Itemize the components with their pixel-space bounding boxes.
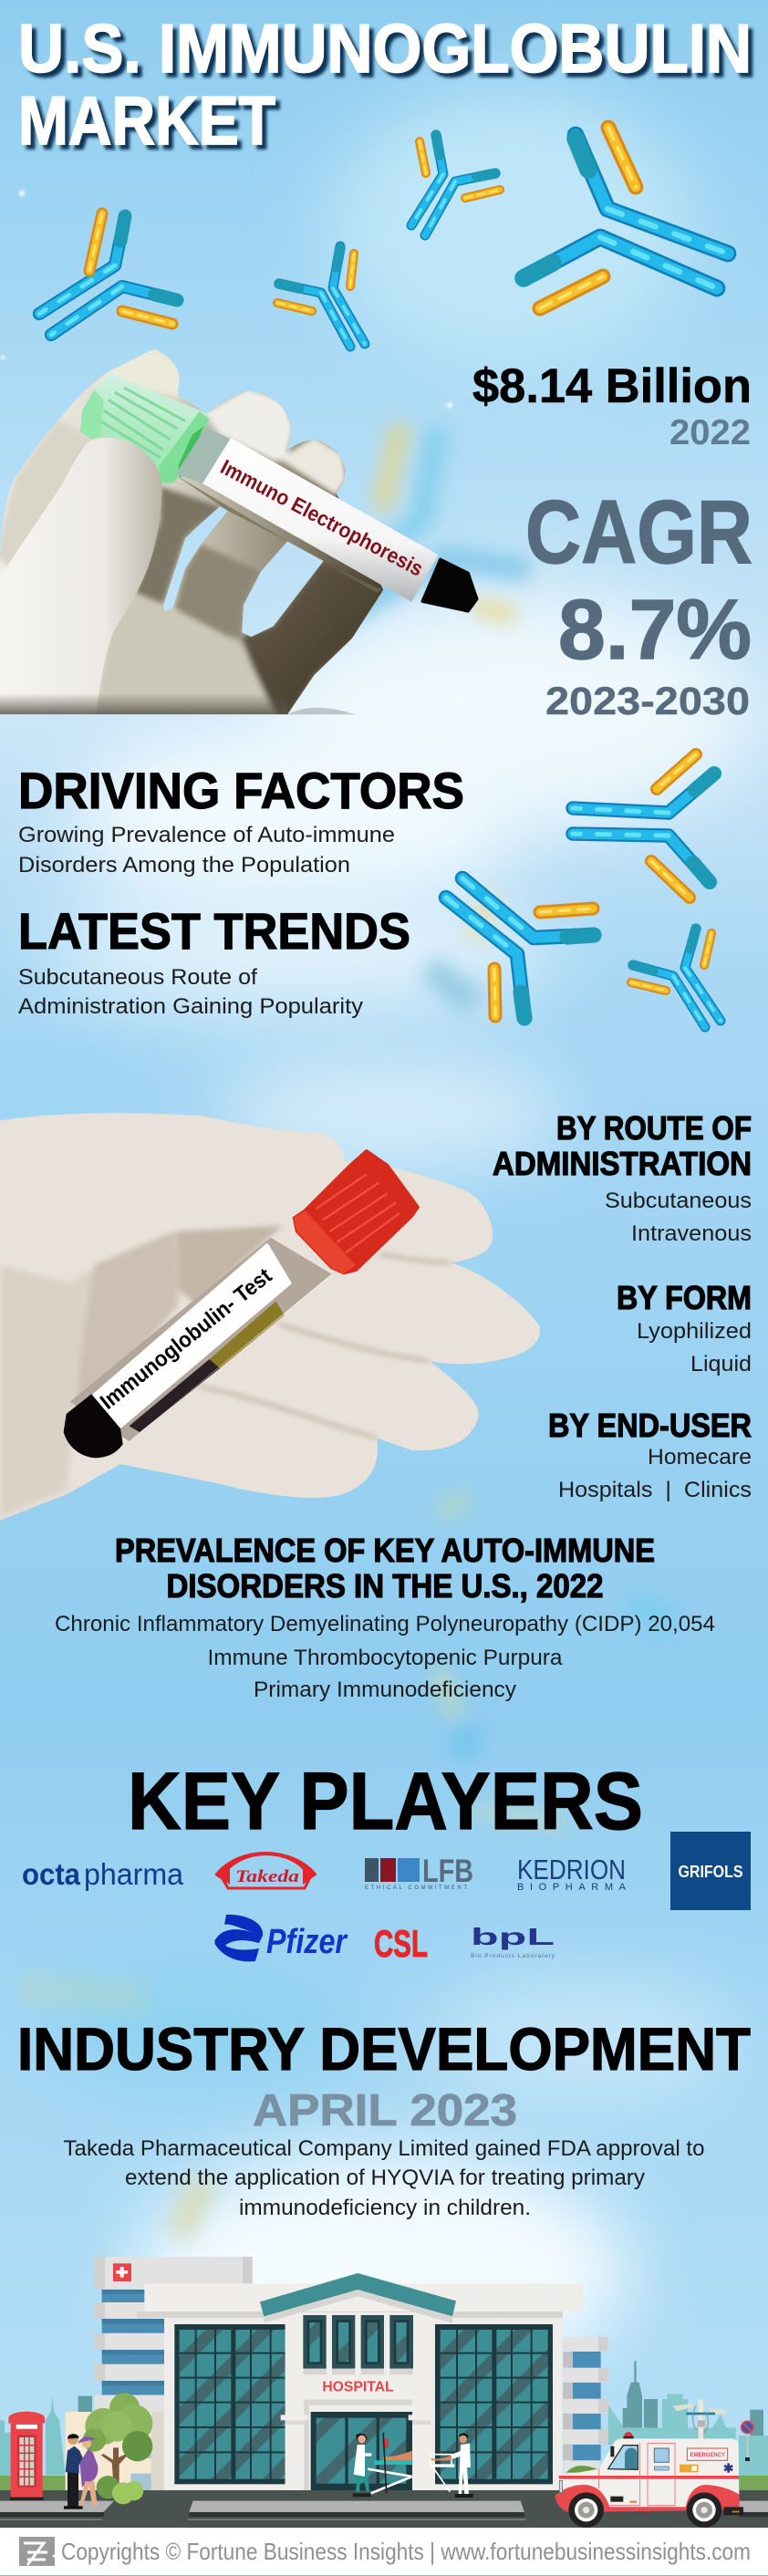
development text — [64, 2136, 705, 2220]
segment: by end-user: Homecare — [648, 1445, 752, 1470]
heading: driving factors — [18, 762, 464, 878]
segment: by route of administration: Intravenous — [631, 1221, 752, 1246]
hospital sign: HOSPITAL — [322, 2380, 394, 2395]
tube label text: Immuno Electrophoresis — [217, 454, 427, 581]
logo: Takeda: Takeda — [235, 1867, 300, 1886]
logo: Takeda — [215, 1854, 316, 1888]
ambulance — [555, 2432, 743, 2528]
illustration: hospital scene — [0, 2257, 768, 2529]
CAGR: 8.7% — [558, 582, 752, 677]
logo: CSL: CSL — [374, 1922, 428, 1965]
grass — [0, 2476, 67, 2501]
couple — [64, 2434, 98, 2509]
CAGR: 2023-2030 — [545, 680, 750, 723]
back tower — [94, 2257, 253, 2412]
heading and list: prevalence: Immune Thrombocytopenic Purpura — [208, 1646, 563, 1670]
segment: by end-user: Hospitals | Clinics — [558, 1478, 752, 1502]
logo: BPL — [471, 1923, 555, 1959]
test tube red cap — [294, 1150, 418, 1274]
heading: latest trends: Subcutaneous Route of — [18, 965, 257, 990]
icon: antibody 3 — [411, 135, 500, 235]
segment: by form: BY FORM — [617, 1279, 752, 1316]
CAGR — [525, 482, 752, 723]
footer — [0, 2528, 768, 2576]
heading and list: prevalence: PREVALENCE OF KEY AUTO-IMMUNE — [115, 1532, 655, 1569]
development text: immunodeficiency in children. — [239, 2196, 531, 2220]
segment: by end-user: BY END-USER — [548, 1407, 752, 1444]
city skyline left — [0, 2396, 92, 2477]
doctor right — [451, 2433, 473, 2498]
segment: by end-user — [548, 1407, 752, 1502]
icon: antibody 4 — [524, 128, 728, 308]
market size — [472, 359, 752, 452]
entrance doors — [311, 2412, 412, 2490]
logo: LFB: LFB — [422, 1854, 473, 1889]
logo: Pfizer — [214, 1915, 348, 1961]
thumb — [0, 438, 161, 714]
heading: driving factors: DRIVING FACTORS — [18, 762, 464, 819]
segment: by form: Lyophilized — [637, 1319, 752, 1344]
title — [18, 10, 752, 159]
ambulance: ✱ — [723, 2462, 733, 2476]
ambulance: EMERGENCY — [690, 2453, 725, 2458]
logo: Grifols: GRIFOLS — [679, 1863, 742, 1881]
logo: Kedrion: BIOPHARMA — [517, 1882, 627, 1893]
development text: Takeda Pharmaceutical Company Limited gained FDA approval to — [64, 2136, 705, 2161]
logo: LFB: ETHICAL COMMITMENT — [365, 1885, 467, 1891]
heading and list: prevalence — [55, 1532, 715, 1702]
logo: Pfizer: Pfizer — [266, 1923, 348, 1961]
segment: by route of administration: ADMINISTRATION — [493, 1145, 752, 1182]
tree and bush — [83, 2393, 152, 2504]
doctor and patient on stretcher — [353, 2434, 371, 2497]
icon: antibody 6 — [446, 878, 594, 1018]
logo: octapharma: octa — [22, 1857, 81, 1891]
icon: Fortune Business Insights logo — [19, 2537, 55, 2566]
heading: driving factors: Growing Prevalence of Auto-immune — [18, 823, 395, 847]
heading: latest trends — [18, 902, 410, 1019]
logo: BPL: Bio Products Laboratory — [471, 1953, 555, 1959]
date: APRIL 2023 — [253, 2086, 517, 2135]
telephone booth — [8, 2412, 45, 2500]
test tube green cap — [80, 373, 209, 483]
centre block — [260, 2273, 456, 2501]
heading and list: prevalence: Chronic Inflammatory Demyelinating Polyneuropathy (CIDP) 20,054 — [55, 1612, 715, 1636]
right tower — [563, 2337, 608, 2491]
tube label text: Immunoglobulin- Test — [96, 1263, 276, 1415]
development text: extend the application of HYQVIA for treating primary — [125, 2166, 645, 2190]
road and pavements — [0, 2490, 768, 2529]
test tube glass and label — [174, 427, 477, 611]
icon: antibody 5 — [573, 754, 714, 898]
logo: octapharma — [22, 1857, 184, 1891]
logo: Grifols — [670, 1832, 751, 1910]
segment: by form: Liquid — [690, 1352, 752, 1376]
photo: gloved hand with green-cap tube — [0, 338, 477, 718]
photo: gloved hand with red-cap tube — [0, 1113, 540, 1521]
icon: antibody 1 — [39, 213, 177, 335]
icon: antibody 2 — [277, 246, 365, 347]
heading: latest trends: Administration Gaining Popularity — [18, 994, 363, 1019]
logo: octapharma: pharma — [84, 1857, 184, 1891]
security cameras and no-parking sign — [566, 2400, 753, 2474]
logo: LFB — [365, 1854, 473, 1891]
logo: BPL: bpL — [471, 1923, 555, 1950]
test tube body and label — [64, 1238, 332, 1458]
right window — [435, 2324, 553, 2484]
left window — [174, 2324, 285, 2484]
segment: by form — [617, 1279, 752, 1376]
heading: driving factors: Disorders Among the Population — [18, 853, 350, 878]
heading: latest trends: LATEST TRENDS — [18, 902, 410, 960]
heading and list: prevalence: Primary Immunodeficiency — [254, 1678, 516, 1702]
market size: 2022 — [669, 413, 751, 452]
segment: by route of administration: Subcutaneous — [605, 1189, 752, 1213]
title: MARKET — [18, 82, 275, 159]
city skyline right — [608, 2361, 768, 2501]
market size: $8.14 Billion — [472, 359, 752, 413]
blurred background antibodies — [18, 424, 675, 2235]
segment: by route of administration — [493, 1109, 752, 1246]
heading and list: prevalence: DISORDERS IN THE U.S., 2022 — [166, 1567, 604, 1605]
logo: Kedrion: KEDRION — [517, 1854, 626, 1885]
main building — [137, 2273, 583, 2501]
beige building — [66, 2412, 164, 2491]
heading: key players: KEY PLAYERS — [128, 1755, 643, 1846]
icon: antibody 7 — [631, 929, 721, 1027]
